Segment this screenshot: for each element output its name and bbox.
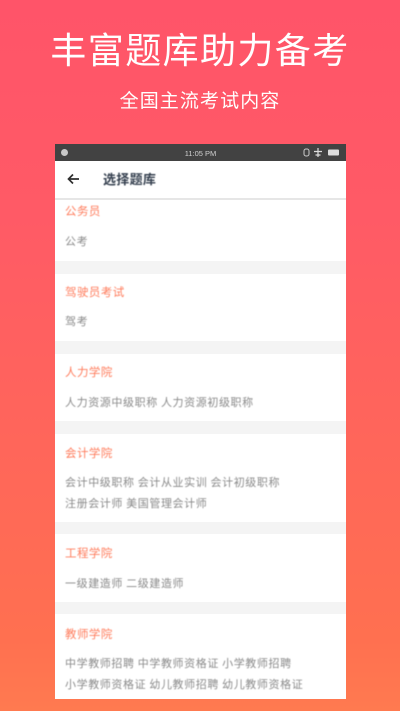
nav divider <box>55 198 346 200</box>
status bar <box>55 144 346 161</box>
status time: 11:05 PM <box>185 149 216 158</box>
section heading: 教师学院 <box>65 629 113 641</box>
section items: 驾考 <box>65 316 88 328</box>
section heading: 人力学院 <box>65 367 113 379</box>
navigation bar <box>55 161 346 198</box>
section: 人力学院 <box>65 366 254 409</box>
section gap <box>55 261 346 274</box>
screen title: 选择题库 <box>103 172 156 187</box>
section: 公务员 <box>65 204 101 248</box>
section items line 2: 注册会计师 美国管理会计师 <box>65 498 207 510</box>
section heading: 工程学院 <box>65 548 113 560</box>
section heading: 驾驶员考试 <box>65 287 125 299</box>
section gap <box>55 522 346 534</box>
section heading: 公务员 <box>65 206 101 218</box>
section items line 1: 会计中级职称 会计从业实训 会计初级职称 <box>65 477 280 489</box>
icon: back arrow <box>67 174 79 184</box>
section: 驾驶员考试 <box>65 286 125 328</box>
section items: 一级建造师 二级建造师 <box>65 578 184 590</box>
section: 会计学院 <box>65 446 280 510</box>
section gap <box>55 602 346 614</box>
section: 教师学院 <box>65 628 303 691</box>
section items line 2: 小学教师资格证 幼儿教师招聘 幼儿教师资格证 <box>65 679 303 691</box>
section gap <box>55 421 346 434</box>
section items line 1: 中学教师招聘 中学教师资格证 小学教师招聘 <box>65 658 292 670</box>
section gap <box>55 341 346 354</box>
section: 工程学院 <box>65 546 184 590</box>
section items: 公考 <box>65 236 88 248</box>
icon: status indicators <box>304 148 339 157</box>
icon: status dot <box>61 149 68 156</box>
title: 丰富题库助力备考 <box>50 30 350 71</box>
subtitle: 全国主流考试内容 <box>120 91 280 112</box>
panel: phone screen <box>55 144 346 699</box>
section heading: 会计学院 <box>65 448 113 460</box>
section items: 人力资源中级职称 人力资源初级职称 <box>65 397 254 409</box>
